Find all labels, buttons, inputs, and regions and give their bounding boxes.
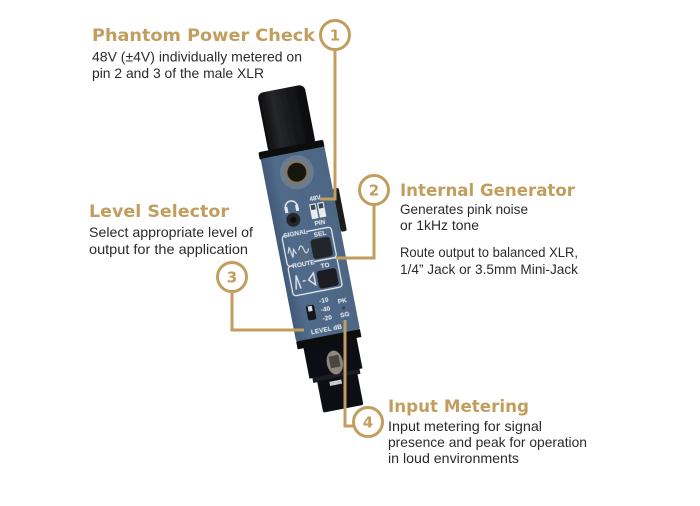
callout: phantom power check: 48V (±4V) individually metered on bbox=[92, 48, 302, 64]
callout: phantom power check bbox=[92, 26, 316, 81]
leader line 2 bbox=[336, 205, 374, 258]
callout: internal generator: Generates pink noise bbox=[400, 201, 528, 217]
XLR female connector bottom bbox=[296, 329, 374, 415]
device: signal tester bbox=[247, 82, 380, 415]
marker 4: 4 bbox=[363, 414, 373, 432]
callout: input metering: in loud environments bbox=[388, 450, 519, 466]
peak and signal labels bbox=[337, 297, 350, 320]
marker 4 bbox=[354, 408, 382, 436]
leader line 3 bbox=[232, 291, 304, 330]
quarter-inch jack bbox=[277, 152, 317, 192]
marker 2: 2 bbox=[369, 182, 379, 200]
callout: input metering bbox=[388, 397, 587, 466]
callout: phantom power check: pin 2 and 3 of the male XLR bbox=[92, 65, 264, 81]
route section: ROUTE bbox=[292, 259, 316, 270]
callout: level selector bbox=[89, 202, 253, 257]
callout: input metering: Input metering for signal bbox=[388, 418, 542, 434]
level labels: -20 bbox=[322, 314, 333, 323]
level labels: LEVEL dB bbox=[310, 324, 343, 336]
signal section bbox=[281, 224, 337, 267]
marker 3: 3 bbox=[227, 268, 237, 286]
signal section: SEL bbox=[313, 230, 327, 239]
callout: internal generator: or 1kHz tone bbox=[400, 217, 479, 233]
callout: input metering: Input Metering bbox=[388, 397, 529, 417]
mini jack with headphone icon bbox=[283, 200, 302, 228]
level labels bbox=[305, 295, 343, 336]
level labels: -40 bbox=[320, 305, 331, 314]
leader line 4 bbox=[345, 320, 355, 426]
callout: phantom power check: Phantom Power Check bbox=[92, 26, 316, 46]
level slide switch bbox=[306, 304, 317, 321]
level labels: -10 bbox=[319, 297, 330, 305]
callout: internal generator: 1/4” Jack or 3.5mm Mini-Jack bbox=[400, 261, 579, 277]
48V pin indicators: 48V bbox=[309, 194, 322, 203]
marker 1: 1 bbox=[330, 26, 340, 44]
leader line 1 bbox=[320, 50, 335, 199]
48V pin indicators: PIN bbox=[314, 219, 326, 228]
callout: internal generator: Internal Generator bbox=[400, 181, 576, 201]
signal section: SIGNAL bbox=[283, 228, 308, 240]
XLR male connector top bbox=[247, 83, 325, 160]
route section: TO bbox=[320, 262, 330, 270]
callout: level selector: Select appropriate level of bbox=[89, 224, 253, 240]
marker 3 bbox=[218, 262, 246, 292]
marker 1 bbox=[320, 20, 350, 50]
peak and signal labels: PK bbox=[337, 297, 348, 306]
callout: level selector: output for the application bbox=[89, 241, 248, 257]
callout: level selector: Level Selector bbox=[89, 202, 230, 222]
callout: input metering: presence and peak for operation bbox=[388, 434, 587, 450]
marker 2 bbox=[360, 176, 388, 204]
side thumbwheel bbox=[333, 188, 347, 232]
device body bbox=[261, 147, 360, 342]
callout: internal generator bbox=[400, 181, 579, 277]
peak and signal labels: SG bbox=[340, 311, 350, 320]
callout: internal generator: Route output to balanced XLR, bbox=[400, 244, 578, 260]
48V pin indicators bbox=[308, 194, 328, 228]
route section bbox=[287, 254, 342, 296]
